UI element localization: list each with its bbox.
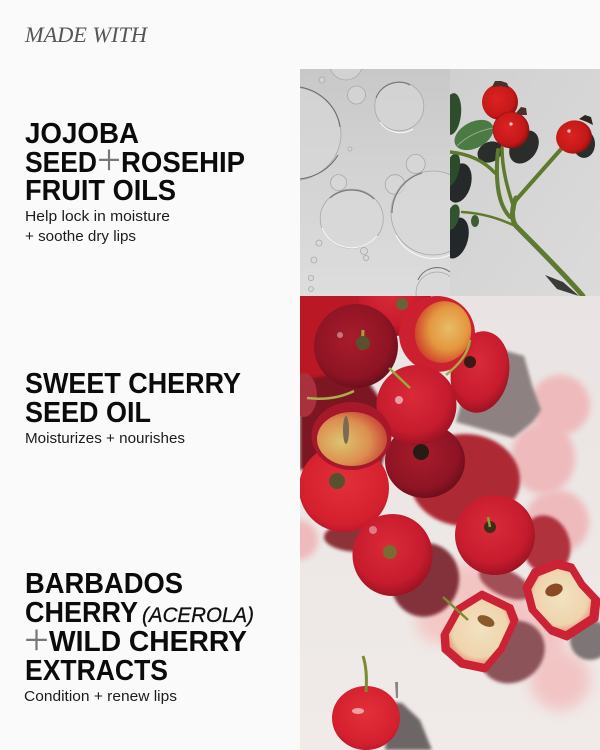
heading: barbados cherry and wild cherry extracts: EXTRACTS: [25, 655, 168, 687]
stems: [450, 148, 583, 296]
title: MADE WITH: [24, 22, 149, 47]
juice stains: [278, 375, 590, 710]
leaves: [450, 93, 493, 230]
heading: jojoba seed and rosehip fruit oils: JOJOBA: [25, 118, 139, 150]
heading: barbados cherry and wild cherry extracts: [24, 568, 254, 687]
heading: sweet cherry seed oil: SWEET CHERRY: [25, 368, 241, 400]
description: jojoba and rosehip benefit: Help lock in moisture: [25, 209, 170, 225]
heading: sweet cherry seed oil: [25, 368, 241, 429]
leaf and berry shadows: [450, 130, 595, 296]
text block: jojoba and rosehip oils: [25, 118, 245, 245]
description: sweet cherry benefit: Moisturizes + nourishes: [25, 431, 185, 447]
heading: jojoba seed and rosehip fruit oils: SEED: [25, 147, 97, 179]
scattered cherries: [332, 495, 598, 750]
heading: sweet cherry seed oil: SEED OIL: [25, 397, 151, 429]
description: jojoba and rosehip benefit: + soothe dry lips: [25, 229, 136, 245]
heading: jojoba seed and rosehip fruit oils: FRUIT OILS: [25, 175, 176, 207]
photo: rosehip branch: [439, 69, 600, 296]
heading: barbados cherry and wild cherry extracts: +: [24, 616, 49, 664]
heading: barbados cherry and wild cherry extracts: WILD CHERRY: [49, 626, 247, 658]
heading: barbados cherry and wild cherry extracts: (ACEROLA): [142, 604, 254, 627]
droplet rim highlights: [300, 82, 450, 280]
cherry pile: [300, 296, 510, 532]
heading: jojoba seed and rosehip fruit oils: +: [97, 136, 121, 184]
heading: barbados cherry and wild cherry extracts: CHERRY: [25, 597, 138, 629]
berries: [482, 81, 596, 158]
description: extracts benefit: Condition + renew lips: [24, 689, 177, 705]
text block: sweet cherry seed oil: [25, 368, 241, 447]
stems and calyx on pile: [307, 298, 476, 489]
description: jojoba and rosehip benefit: [25, 209, 170, 245]
heading: jojoba seed and rosehip fruit oils: ROSEHIP: [121, 147, 245, 179]
photo: barbados cherries: [300, 296, 600, 750]
heading: barbados cherry and wild cherry extracts: BARBADOS: [25, 568, 183, 600]
heading: jojoba seed and rosehip fruit oils: [25, 118, 245, 207]
photo: oil droplets: [300, 69, 450, 296]
text block: barbados and wild cherry extracts: [24, 568, 254, 705]
cast shadows: [324, 350, 600, 750]
